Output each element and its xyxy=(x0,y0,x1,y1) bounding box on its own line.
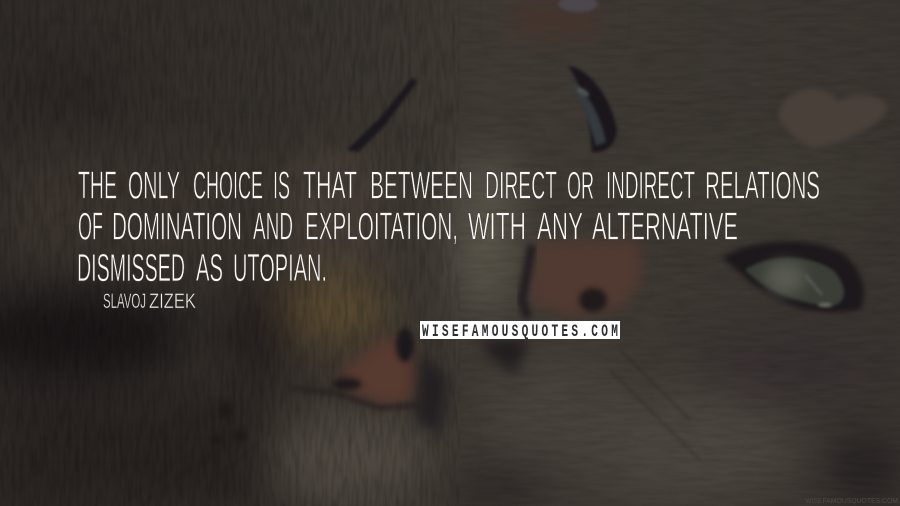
quote line 2: ALTERNATIVE xyxy=(592,205,738,248)
logo: wisefamousquotes.com: WISEFAMOUSQUOTES.COM xyxy=(422,323,618,342)
shadow between cats xyxy=(415,350,448,435)
quote line 2: DOMINATION xyxy=(112,205,242,248)
quote line 2: AND xyxy=(253,205,293,248)
right cat fur tones xyxy=(450,145,900,506)
left cat nose xyxy=(340,335,416,408)
quote line 2 xyxy=(78,205,738,248)
quote line 1: DIRECT xyxy=(485,164,557,207)
quote line 1: CHOICE xyxy=(193,164,263,207)
quote line 3: DISMISSED xyxy=(77,247,185,290)
left cat eye slit xyxy=(347,78,417,152)
quote line 1: THAT xyxy=(303,164,357,207)
quote line 1 xyxy=(78,164,820,207)
fur texture: top and left xyxy=(0,0,460,506)
quote line 1: INDIRECT xyxy=(606,164,695,207)
quote text xyxy=(77,164,820,290)
dark spots on left cat cheek xyxy=(211,401,247,445)
quote line 1: THE xyxy=(78,164,117,207)
quote line 1: IS xyxy=(273,164,290,207)
heart-shaped bokeh xyxy=(778,88,887,147)
lower right cat eye xyxy=(722,241,864,312)
quote line 2: OF xyxy=(78,205,103,248)
bottom-right watermark: WISEFAMOUSQUOTES.COM xyxy=(805,498,898,505)
quote line 2: ANY xyxy=(537,205,583,248)
quote line 3: AS xyxy=(196,247,223,290)
fur strokes xyxy=(122,350,700,505)
quote line 2: EXPLOITATION, xyxy=(305,205,458,248)
right cat nose xyxy=(528,240,642,316)
fur texture: right xyxy=(460,0,900,506)
quote line 1: OR xyxy=(567,164,594,207)
quote line 1: BETWEEN xyxy=(370,164,473,207)
left cat fur tones xyxy=(0,70,435,506)
quote line 1: ONLY xyxy=(128,164,180,207)
bokeh dot xyxy=(558,0,598,12)
author: ZIZEK xyxy=(149,290,196,313)
top right cat eye xyxy=(568,66,617,152)
quote line 2: WITH xyxy=(468,205,526,248)
quote line 3: UTOPIAN. xyxy=(233,247,327,290)
author: SLAVOJ xyxy=(103,290,146,313)
pink top patch xyxy=(510,0,600,40)
